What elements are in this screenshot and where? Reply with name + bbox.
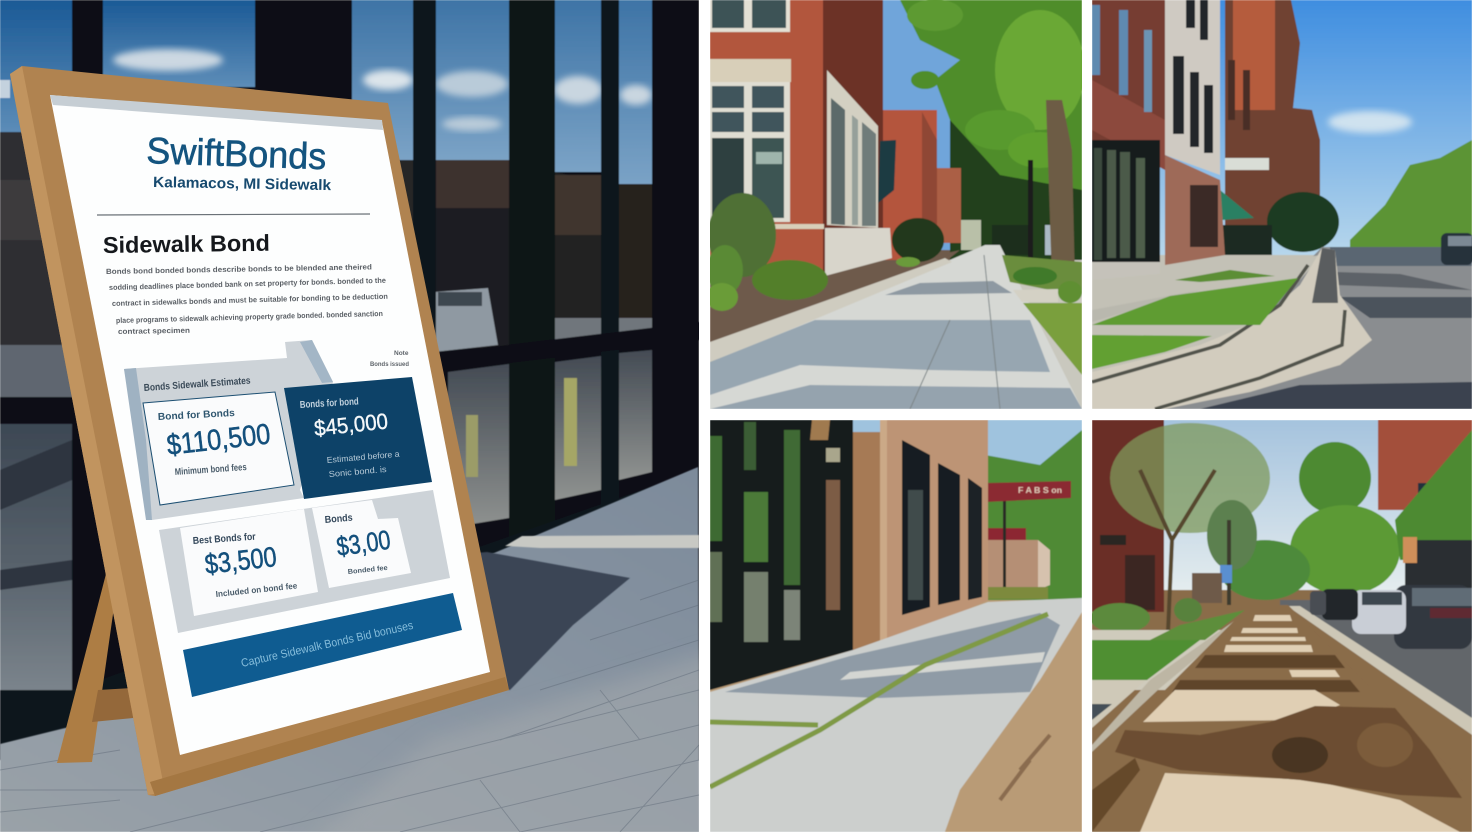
panel: new sidewalk beside brick building: [706, 0, 1085, 409]
concrete curb: [710, 258, 952, 362]
grass strip: [1002, 255, 1082, 375]
sign body text: Bonds bond bonded bonds describe bonds to be blended ane theired: [106, 262, 372, 276]
bond amounts grey panel: [124, 340, 333, 520]
panel: storefront with sign photo: [0, 0, 720, 832]
sign subtitle: Kalamacos, MI Sidewalk: [153, 174, 332, 194]
lower panes: [448, 364, 509, 528]
card: $110,500: Bond for Bonds: [158, 408, 235, 423]
panel label: Bonds Sidewalk Estimates: [143, 376, 251, 394]
call to action banner: Capture Sidewalk Bonds Bid bonuses: [240, 620, 415, 670]
tree line: [1350, 140, 1472, 248]
hanging banner: [878, 140, 896, 203]
brick building: [710, 0, 896, 276]
grass joint lines: [710, 614, 1048, 787]
small corner note: Note: [394, 350, 409, 357]
call to action banner: [183, 593, 462, 697]
sign heading: Sidewalk Bond: [103, 230, 270, 258]
card: $3,00: Bonded fee: [347, 565, 388, 576]
red roadside sign: [986, 481, 1071, 502]
sidewalk: [710, 245, 1082, 409]
sign body text: sodding deadlines place bonded bank on set property for bonds. bonded to the: [109, 276, 386, 292]
soil mound: [1115, 706, 1462, 798]
dirt trench: [1092, 605, 1472, 832]
reflected car: [434, 288, 498, 352]
left pane reflection: [0, 0, 72, 134]
card: $3,00: [312, 500, 411, 588]
panel: street with curved curb: [1092, 0, 1472, 409]
card: $3,00: Bonds: [324, 513, 354, 526]
lower grey panel: [159, 490, 450, 633]
background trees: [985, 430, 1082, 600]
sign body text: contract in sidewalks bonds and must be suitable for bonding to be deduction: [112, 292, 388, 308]
card: $3,500: Included on bond fee: [215, 580, 298, 599]
distant buildings: [882, 110, 981, 260]
sixth pane: [619, 0, 652, 186]
small corner note: [370, 350, 409, 366]
grass and footpath: [1092, 610, 1252, 752]
storefront glass and frames: [0, 0, 700, 760]
card: $45,000: Sonic bond. is: [328, 464, 387, 479]
sign body text: [106, 262, 388, 336]
sidewalk and curb: [1092, 248, 1372, 409]
easel leg: [57, 570, 133, 763]
card: $3,00: $3,00: [335, 525, 392, 562]
fourth pane: [436, 0, 509, 160]
third pane: [352, 0, 414, 160]
card: $3,500: Best Bonds for: [192, 532, 256, 547]
sidewalk: [710, 598, 1082, 832]
paved ground: [0, 467, 720, 832]
small corner note: Bonds issued: [370, 361, 409, 368]
sign poster: [50, 95, 490, 755]
card: $110,500: $110,500: [165, 418, 272, 462]
road and kerb: [1270, 600, 1472, 832]
brick buildings: [1092, 420, 1472, 612]
bushes and planting bed: [710, 192, 960, 312]
frame mullions: [74, 689, 75, 690]
brand name: SwiftBonds: [146, 130, 327, 177]
card: $110,500: Minimum bond fees: [174, 462, 247, 478]
card: $3,500: [180, 509, 318, 616]
panel: excavated sidewalk on street: [1090, 420, 1472, 832]
card: $45,000: Estimated before a: [326, 449, 400, 465]
road: [1165, 247, 1472, 409]
parked car: [1441, 233, 1472, 265]
grass patches: [1092, 270, 1298, 369]
panel: tan brick storefront sidewalk: [710, 420, 1082, 832]
tan brick building: [852, 420, 988, 652]
concrete patches: [1140, 615, 1460, 832]
sign frame: [10, 66, 509, 796]
sign body text: place programs to sidewalk achieving property grade bonded. bonded sanction: [116, 309, 383, 325]
excavated soil: [945, 620, 1082, 832]
card: $45,000: $45,000: [313, 408, 389, 441]
card: $110,500: [143, 392, 294, 505]
card: $45,000: Bonds for bond: [300, 396, 359, 411]
second pane: [103, 0, 255, 87]
card: $45,000: [284, 377, 432, 499]
glass doors: [710, 420, 853, 690]
card: $3,500: $3,500: [203, 541, 278, 580]
red roadside sign: F A B S on: [1018, 486, 1062, 495]
fifth pane: [555, 0, 601, 172]
sign body text: contract specimen: [118, 326, 190, 336]
parked cars: [1310, 585, 1472, 649]
street buildings: [1092, 0, 1339, 282]
street trees: [1090, 423, 1472, 633]
tree foliage: [900, 0, 1085, 282]
